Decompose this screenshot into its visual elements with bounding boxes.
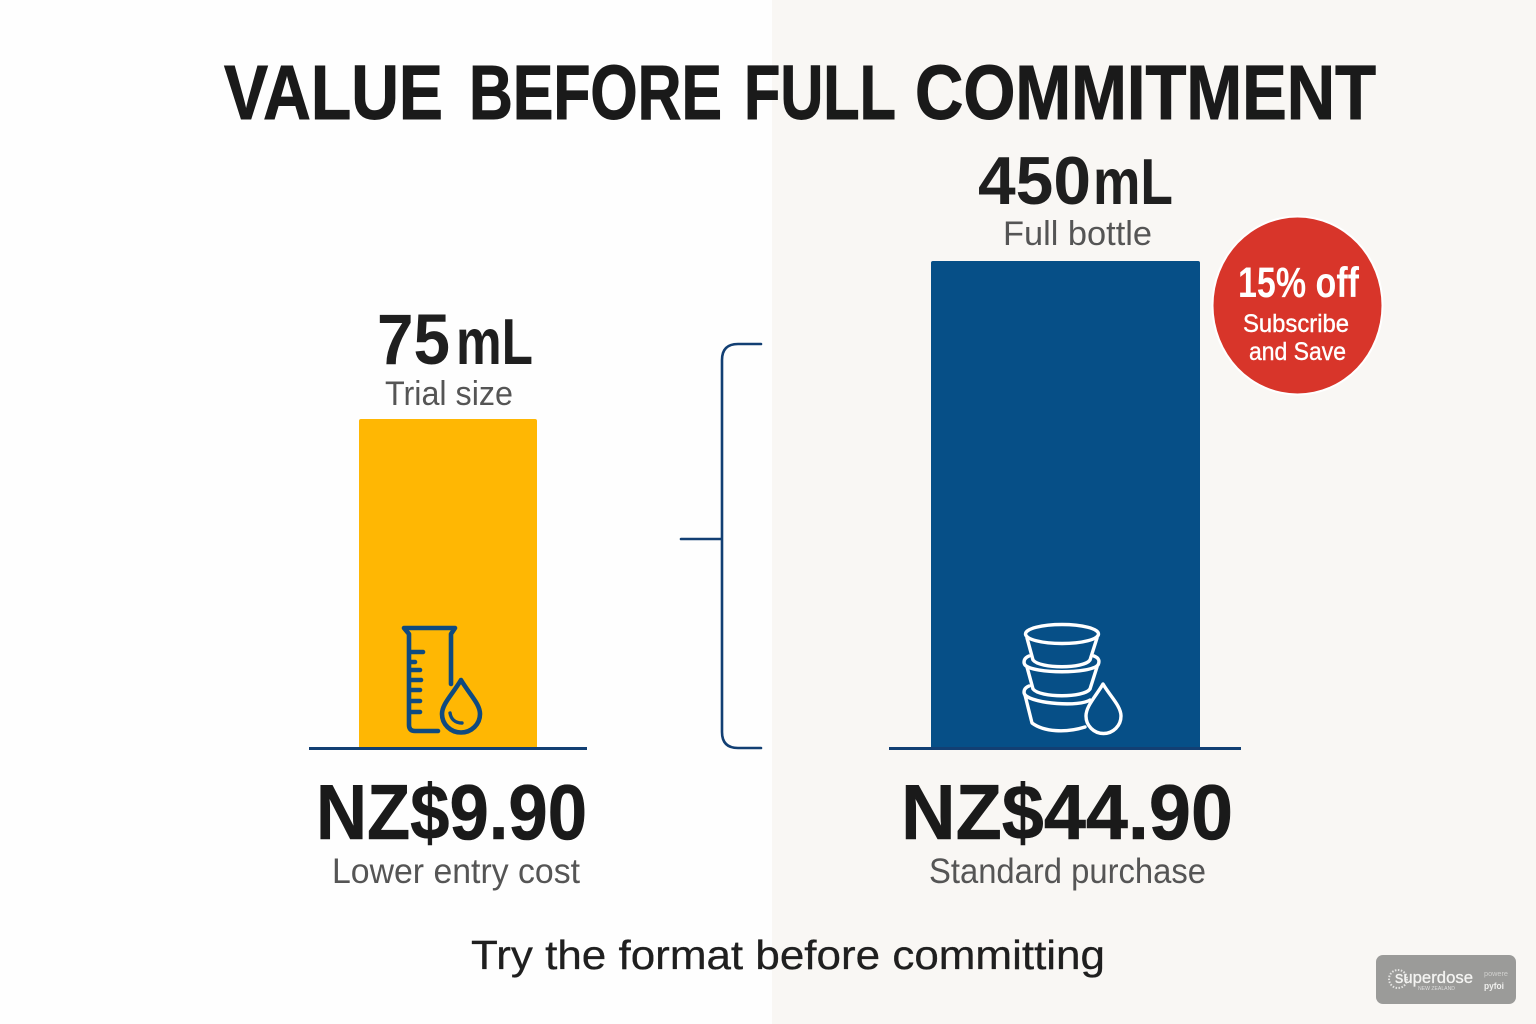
panel: full bottle column [889,143,1241,891]
full bar [931,261,1200,748]
logo badge: powere [1484,971,1508,978]
full volume: 450 [978,143,1091,219]
logo badge: NEW ZEALAND [1418,986,1455,992]
bracket connector [681,344,761,748]
full price: NZ$44.90 [901,768,1233,856]
title: FULL [744,50,896,136]
callout: subscribe discount badge: Subscribe [1243,310,1349,338]
full price caption: Standard purchase [929,852,1206,891]
trial price: NZ$9.90 [316,768,587,856]
logo badge: superdose [1395,968,1473,987]
panel: left background [0,0,772,1024]
panel: trial size column [309,301,587,891]
trial volume [377,301,533,380]
logo badge [1376,955,1516,1004]
icon: stacked cups with drop [1024,624,1121,734]
trial bar baseline [309,747,587,750]
full volume [978,143,1173,219]
icon: beaker with drop [404,628,480,733]
trial label: Trial size [385,375,513,413]
trial volume: 75 [377,301,450,380]
full label: Full bottle [1003,215,1152,253]
trial volume: mL [456,305,533,378]
callout: subscribe discount badge: 15% off [1238,259,1360,307]
logo badge: pyfoi [1484,981,1504,991]
footer tagline: Try the format before committing [471,932,1105,978]
callout: subscribe discount badge [1212,216,1384,396]
callout: subscribe discount badge: and Save [1249,338,1346,366]
full volume: mL [1093,145,1173,218]
title: VALUE [224,50,443,136]
trial price caption: Lower entry cost [332,852,580,891]
panel: right background [772,0,1536,1024]
full bar baseline [889,747,1241,750]
title: COMMITMENT [915,50,1376,136]
trial bar [359,419,537,748]
title [224,50,1376,136]
title: BEFORE [469,50,722,136]
